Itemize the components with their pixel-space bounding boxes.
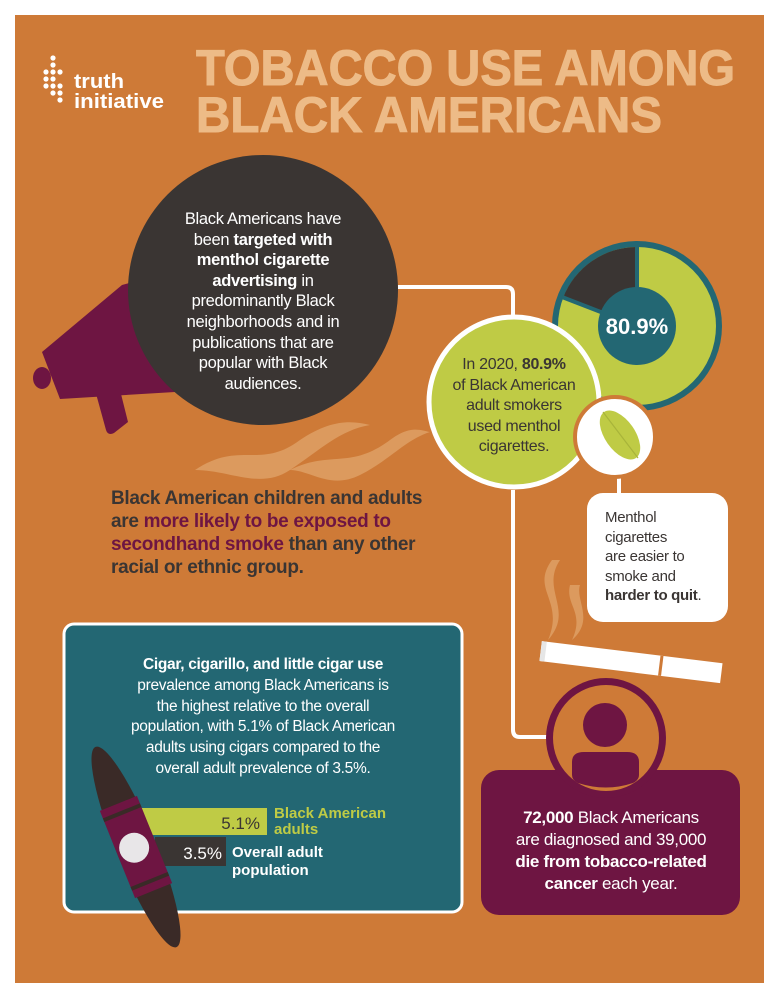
text: green circle: used menthol (468, 418, 560, 434)
text: dark circle: been targeted with (194, 231, 332, 249)
bar chart (141, 805, 386, 879)
text: dark circle: audiences. (225, 375, 301, 393)
green circle (429, 317, 599, 487)
text: green circle: In 2020, 80.9% (462, 356, 566, 373)
text: dark circle: menthol cigarette (197, 251, 329, 269)
title (196, 40, 735, 143)
dark circle (128, 155, 398, 425)
text: purple box: die from tobacco-related (515, 852, 707, 871)
text: teal panel (131, 656, 395, 777)
cigarette icon (539, 641, 723, 683)
text: menthol box: are easier to (605, 548, 684, 565)
logo: truth initiative (43, 55, 164, 113)
text: secondhand smoke: racial or ethnic group. (111, 557, 304, 578)
text: menthol box (605, 509, 701, 604)
bar chart: population (232, 862, 309, 879)
text: secondhand smoke: Black American children and adults (111, 488, 422, 509)
text: menthol box: cigarettes (605, 528, 667, 546)
text: teal panel: the highest relative to the overall (157, 698, 369, 715)
text: dark circle: publications that are (192, 334, 334, 352)
text: teal panel: Cigar, cigarillo, and little cigar use (143, 656, 383, 673)
text: teal panel: overall adult prevalence of 3.5%. (156, 760, 370, 777)
menthol box (587, 493, 728, 622)
text: dark circle (185, 210, 341, 393)
title: BLACK AMERICANS (196, 87, 662, 143)
donut chart 80.9%: 80.9% (606, 314, 668, 339)
title: TOBACCO USE AMONG (196, 40, 735, 96)
text: dark circle: advertising in (212, 272, 314, 290)
donut chart 80.9% (552, 241, 722, 411)
text: dark circle: neighborhoods and in (187, 313, 339, 331)
text: teal panel: adults using cigars compared to the (146, 739, 380, 756)
person icon circle (546, 678, 666, 798)
text: secondhand smoke (111, 488, 422, 578)
connector lines (398, 287, 619, 737)
text: green circle: cigarettes. (479, 438, 549, 455)
text: purple box: are diagnosed and 39,000 (516, 830, 706, 849)
text: dark circle: Black Americans have (185, 210, 341, 228)
text: green circle: adult smokers (466, 397, 562, 414)
text: dark circle: popular with Black (199, 354, 327, 372)
bar chart: 5.1% (221, 814, 260, 833)
purple box (481, 770, 740, 915)
cigarette smoke decorative (544, 560, 583, 640)
text: dark circle: predominantly Black (192, 292, 334, 310)
text: purple box: cancer each year. (545, 874, 677, 893)
teal panel (64, 624, 462, 912)
megaphone icon (33, 280, 175, 434)
text: purple box (515, 808, 707, 893)
text: green circle (453, 356, 575, 455)
text: menthol box: smoke and (605, 568, 676, 584)
text: teal panel: population, with 5.1% of Black American (131, 718, 395, 735)
logo: truth initiative: initiative (74, 91, 164, 113)
text: secondhand smoke: secondhand smoke than any other (111, 534, 415, 555)
bar chart: Black American (274, 805, 386, 822)
leaf icon circle (575, 397, 655, 477)
text: teal panel: prevalence among Black Americans is (137, 677, 389, 694)
text: menthol box: harder to quit. (605, 587, 701, 604)
smoke swirls decorative (195, 422, 430, 481)
bar chart: adults (274, 821, 318, 838)
text: menthol box: Menthol (605, 509, 656, 526)
cigar icon (77, 739, 195, 955)
text: purple box: 72,000 Black Americans (523, 808, 699, 827)
bar chart: Overall adult (232, 844, 323, 861)
logo: truth initiative: truth (74, 71, 124, 93)
text: green circle: of Black American (453, 376, 575, 394)
text: secondhand smoke: are more likely to be exposed to (111, 511, 391, 532)
bar chart: 3.5% (183, 844, 222, 863)
